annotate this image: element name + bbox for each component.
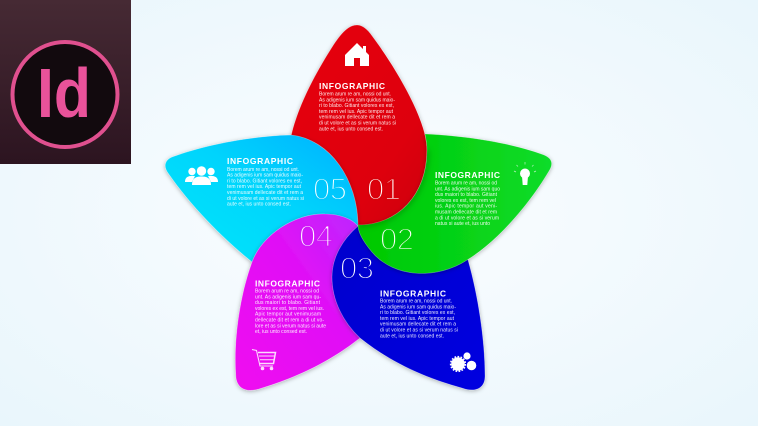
number 05: 05 bbox=[313, 172, 347, 206]
text block 05: venimusam dellecate dit et rem a bbox=[227, 190, 303, 196]
icon: people bbox=[185, 166, 218, 185]
icon: light bulb bbox=[514, 162, 536, 185]
text block 03: di ut volore et as si verum natus si bbox=[380, 328, 458, 334]
text block 01 bbox=[319, 92, 396, 132]
text block 04: et, ius unto consed est. bbox=[255, 329, 307, 335]
text block 01: di ut volore et as si verum natus si bbox=[319, 120, 396, 126]
text block 02: ius. Apic tempor aut veni- bbox=[435, 204, 497, 210]
text block 02: dus maiori to blabo. Gitiant bbox=[435, 192, 498, 198]
text block 05: di ut volore et as si verum natus si bbox=[227, 196, 304, 202]
petal 03: blue bbox=[332, 220, 485, 390]
text block 03: As adigenis ium sam quidus maio- bbox=[380, 304, 456, 310]
text block 02: natus si aute et, ius unto bbox=[435, 221, 490, 227]
text block 02: unt. As adigenis ium sam quo bbox=[435, 186, 500, 192]
petal 04: magenta bbox=[235, 214, 360, 390]
text block 05: aute et, ius unto consed est. bbox=[227, 202, 291, 208]
InDesign logo tile bbox=[0, 0, 131, 164]
heading 03: INFOGRAPHIC bbox=[380, 288, 446, 298]
heading 05: INFOGRAPHIC bbox=[227, 156, 293, 166]
text block 04: unt. As adigenis ium sam qu- bbox=[255, 294, 321, 300]
text block 04 bbox=[255, 288, 326, 335]
number 01: 01 bbox=[367, 172, 401, 206]
text block 01: Borem arum re am, nossi od unt. bbox=[319, 92, 391, 98]
number 02: 02 bbox=[380, 222, 414, 256]
text block 03: aute et, ius unto consed est. bbox=[380, 333, 444, 339]
text block 01: aute et, ius unto consed est. bbox=[319, 126, 383, 132]
heading 02: INFOGRAPHIC bbox=[435, 170, 500, 180]
text block 01: venimusam dellecate dit et rem a bbox=[319, 115, 395, 121]
text block 03: venimusam dellecate dit et rem a bbox=[380, 322, 456, 328]
text block 05: Borem arum re am, nossi od unt. bbox=[227, 167, 299, 173]
petal 02: green bbox=[358, 134, 552, 273]
text block 02: a di ut volore et as si verum bbox=[435, 215, 499, 221]
text block 01: tem rem vel ius. Apic tempor aut bbox=[319, 109, 394, 115]
text block 05: tem rem vel ius. Apic tempor aut bbox=[227, 184, 302, 190]
text block 03: ri to blabo. Gitiant volores ex est, bbox=[380, 310, 455, 316]
icon: gears bbox=[451, 352, 476, 371]
text block 04: dellecate dit et rem a di ut vo- bbox=[255, 318, 324, 324]
number 04: 04 bbox=[299, 218, 333, 254]
number 03: 03 bbox=[340, 250, 374, 286]
text block 04: lore et as si verum natus si aute bbox=[255, 323, 326, 329]
petal 01: red bbox=[291, 25, 427, 226]
text block 04: Borem arum re am, nossi od bbox=[255, 288, 319, 294]
text block 03 bbox=[380, 298, 458, 339]
icon: house bbox=[345, 43, 369, 66]
petal 05: cyan bbox=[165, 135, 358, 262]
text block 03: Borem arum re am, nossi od unt. bbox=[380, 298, 452, 304]
text block 01: As adigenis ium sam quidus maio- bbox=[319, 97, 395, 103]
text block 02: musam dellecate dit et rem bbox=[435, 210, 497, 216]
text block 04: dus maiori to blabo. Gitiant bbox=[255, 300, 321, 306]
text block 05: ri to blabo. Gitiant volores ex est, bbox=[227, 178, 302, 184]
InDesign logo tile: Id bbox=[37, 54, 91, 132]
text block 01: ri to blabo. Gitiant volores ex est, bbox=[319, 103, 394, 109]
heading 04: INFOGRAPHIC bbox=[255, 278, 320, 288]
text block 02: volores ex est, tem rem vel bbox=[435, 198, 496, 204]
text block 02 bbox=[435, 180, 500, 227]
text block 04: Apic tempor aut venimusam bbox=[255, 312, 321, 318]
text block 05: As adigenis ium sam quidus maio- bbox=[227, 173, 303, 179]
text block 02: Borem arum re am, nossi od bbox=[435, 180, 497, 186]
text block 03: tem rem vel ius. Apic tempor aut bbox=[380, 316, 455, 322]
icon: shopping cart bbox=[252, 350, 276, 370]
text block 04: volores ex est, tem rem vel ius. bbox=[255, 306, 324, 312]
text block 05 bbox=[227, 167, 304, 208]
heading 01: INFOGRAPHIC bbox=[319, 81, 385, 91]
